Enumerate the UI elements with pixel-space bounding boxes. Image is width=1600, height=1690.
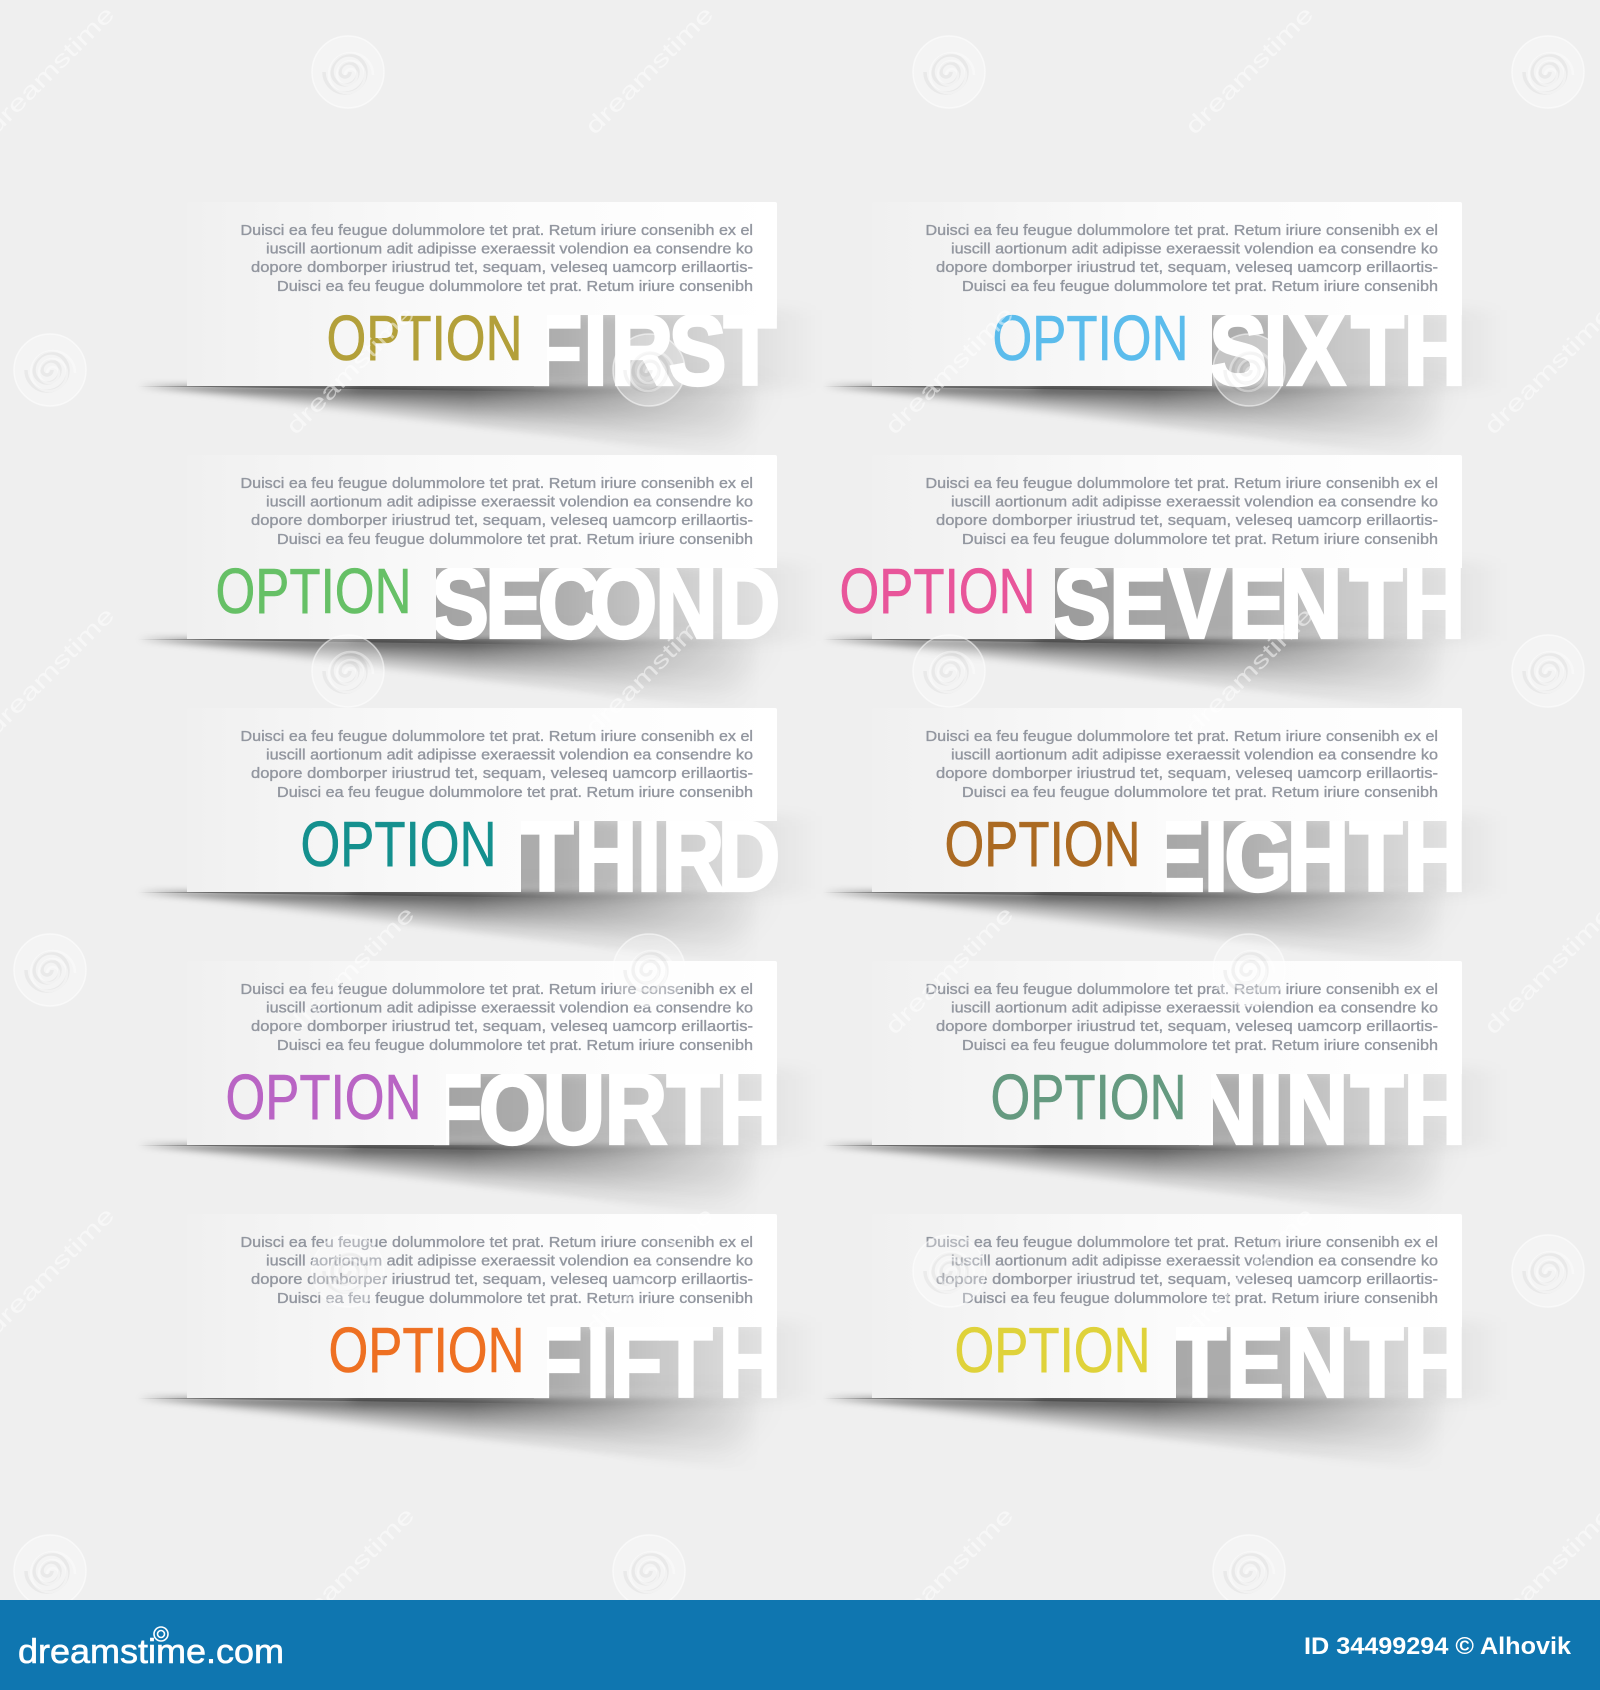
panel: option third: THIRD <box>521 801 780 912</box>
panel: option first: FIRST <box>530 295 776 406</box>
panel: option seventh <box>823 455 1505 719</box>
panel: option fifth: iuscill aortionum adit adipisse exeraessit volendion ea consendre ko <box>266 1254 753 1270</box>
icon: logo spiral <box>154 1627 168 1641</box>
panel: option fourth: Duisci ea feu feugue dolummolore tet prat. Retum iriure consenibh ex el <box>240 982 753 998</box>
panel: option fifth: dopore domborper iriustrud tet, sequam, veleseq uamcorp erillaortis- <box>251 1272 753 1288</box>
footer credit: ID 34499294 © Alhovik <box>1304 1633 1572 1660</box>
panel: option eighth <box>823 708 1505 972</box>
panel: option third: dopore domborper iriustrud tet, sequam, veleseq uamcorp erillaortis- <box>251 766 753 782</box>
panel: option sixth: dopore domborper iriustrud tet, sequam, veleseq uamcorp erillaortis- <box>936 260 1438 276</box>
panel: option first: Duisci ea feu feugue dolummolore tet prat. Retum iriure consenibh <box>277 279 753 295</box>
watermark overlay: dreamstime <box>1180 602 1318 740</box>
panel: option fourth: OPTION <box>226 1061 422 1133</box>
panel: option sixth: Duisci ea feu feugue dolummolore tet prat. Retum iriure consenibh <box>962 279 1438 295</box>
panel: option second: iuscill aortionum adit adipisse exeraessit volendion ea consendre ko <box>266 495 753 511</box>
panel: option fifth: FIFTH <box>530 1307 781 1418</box>
panel: option seventh: Duisci ea feu feugue dolummolore tet prat. Retum iriure consenibh ex el <box>926 476 1438 492</box>
panel: option first <box>138 202 820 466</box>
footer logo: dreamstime.com: dreamstime.com <box>18 1633 284 1671</box>
panel: option eighth: EIGHTH <box>1147 801 1466 912</box>
panel: option tenth: OPTION <box>954 1314 1150 1386</box>
watermark overlay: dreamstime <box>1479 301 1600 439</box>
footer banner <box>0 1600 1600 1690</box>
panel: option tenth: Duisci ea feu feugue dolummolore tet prat. Retum iriure consenibh <box>962 1291 1438 1307</box>
watermark overlay: dreamstime <box>880 901 1018 1039</box>
panel: option second <box>138 455 820 719</box>
panel: option first: dopore domborper iriustrud tet, sequam, veleseq uamcorp erillaortis- <box>251 260 753 276</box>
panel: option fourth: FOURTH <box>430 1054 781 1165</box>
panel: option fourth: Duisci ea feu feugue dolummolore tet prat. Retum iriure consenibh <box>277 1038 753 1054</box>
panel: option fifth <box>138 1214 820 1478</box>
panel: option eighth: OPTION <box>944 808 1140 880</box>
panel: option tenth: TENTH <box>1174 1307 1466 1418</box>
panel: option second: dopore domborper iriustrud tet, sequam, veleseq uamcorp erillaortis- <box>251 513 753 529</box>
panel: option sixth: SIXTH <box>1209 295 1466 406</box>
panel: option fifth: OPTION <box>328 1314 524 1386</box>
panel: option eighth: dopore domborper iriustrud tet, sequam, veleseq uamcorp erillaortis- <box>936 766 1438 782</box>
watermark overlay: dreamstime <box>880 301 1018 439</box>
panel: option fourth: dopore domborper iriustrud tet, sequam, veleseq uamcorp erillaortis- <box>251 1019 753 1035</box>
panel: option first: Duisci ea feu feugue dolummolore tet prat. Retum iriure consenibh ex el <box>240 223 753 239</box>
panel: option tenth <box>823 1214 1505 1478</box>
panel: option ninth: OPTION <box>990 1061 1186 1133</box>
watermark overlay: dreamstime <box>1180 1 1318 139</box>
watermark overlay: dreamstime <box>1479 1502 1600 1640</box>
panel: option tenth: dopore domborper iriustrud tet, sequam, veleseq uamcorp erillaortis- <box>936 1272 1438 1288</box>
panel: option fourth: iuscill aortionum adit adipisse exeraessit volendion ea consendre ko <box>266 1001 753 1017</box>
panel: option second: OPTION <box>216 555 412 627</box>
panel: option fifth: Duisci ea feu feugue dolummolore tet prat. Retum iriure consenibh ex el <box>240 1235 753 1251</box>
panel: option seventh: OPTION <box>840 555 1036 627</box>
panel: option second: Duisci ea feu feugue dolummolore tet prat. Retum iriure consenibh ex el <box>240 476 753 492</box>
panel: option third: Duisci ea feu feugue dolummolore tet prat. Retum iriure consenibh <box>277 785 753 801</box>
panel: option seventh: SEVENTH <box>1053 548 1465 659</box>
panel: option ninth: iuscill aortionum adit adipisse exeraessit volendion ea consendre ko <box>951 1001 1438 1017</box>
panel: option second: SECOND <box>431 548 780 659</box>
watermark overlay: dreamstime <box>580 602 718 740</box>
watermark overlay: dreamstime <box>281 901 419 1039</box>
watermark overlay: dreamstime <box>1180 1202 1318 1340</box>
panel: option fourth <box>138 961 820 1225</box>
panel: option eighth: Duisci ea feu feugue dolummolore tet prat. Retum iriure consenibh ex el <box>926 729 1438 745</box>
watermark overlay: dreamstime <box>1479 901 1600 1039</box>
panel: option third: Duisci ea feu feugue dolummolore tet prat. Retum iriure consenibh ex el <box>240 729 753 745</box>
watermark overlay: dreamstime <box>281 301 419 439</box>
panel: option sixth: iuscill aortionum adit adipisse exeraessit volendion ea consendre ko <box>951 242 1438 258</box>
watermark overlay: dreamstime <box>880 1502 1018 1640</box>
panel: option eighth: iuscill aortionum adit adipisse exeraessit volendion ea consendre ko <box>951 748 1438 764</box>
panel: option seventh: iuscill aortionum adit adipisse exeraessit volendion ea consendre ko <box>951 495 1438 511</box>
panel: option ninth: NINTH <box>1195 1054 1466 1165</box>
panel: option seventh: dopore domborper iriustrud tet, sequam, veleseq uamcorp erillaortis- <box>936 513 1438 529</box>
watermark overlay: dreamstime <box>580 1202 718 1340</box>
panel: option first: OPTION <box>326 302 522 374</box>
panel: option tenth: Duisci ea feu feugue dolummolore tet prat. Retum iriure consenibh ex el <box>926 1235 1438 1251</box>
panel: option seventh: Duisci ea feu feugue dolummolore tet prat. Retum iriure consenibh <box>962 532 1438 548</box>
panel: option ninth: dopore domborper iriustrud tet, sequam, veleseq uamcorp erillaortis- <box>936 1019 1438 1035</box>
panel: option tenth: iuscill aortionum adit adipisse exeraessit volendion ea consendre ko <box>951 1254 1438 1270</box>
panel: option sixth <box>823 202 1505 466</box>
panel: option third: OPTION <box>300 808 496 880</box>
watermark overlay: dreamstime <box>580 1 718 139</box>
panel: option third <box>138 708 820 972</box>
panel: option fifth: Duisci ea feu feugue dolummolore tet prat. Retum iriure consenibh <box>277 1291 753 1307</box>
panel: option eighth: Duisci ea feu feugue dolummolore tet prat. Retum iriure consenibh <box>962 785 1438 801</box>
panel: option ninth: Duisci ea feu feugue dolummolore tet prat. Retum iriure consenibh ex el <box>926 982 1438 998</box>
watermark overlay: dreamstime <box>281 1502 419 1640</box>
panel: option first: iuscill aortionum adit adipisse exeraessit volendion ea consendre ko <box>266 242 753 258</box>
panel: option ninth: Duisci ea feu feugue dolummolore tet prat. Retum iriure consenibh <box>962 1038 1438 1054</box>
panel: option second: Duisci ea feu feugue dolummolore tet prat. Retum iriure consenibh <box>277 532 753 548</box>
panel: option third: iuscill aortionum adit adipisse exeraessit volendion ea consendre ko <box>266 748 753 764</box>
panel: option sixth: OPTION <box>992 302 1188 374</box>
panel: option sixth: Duisci ea feu feugue dolummolore tet prat. Retum iriure consenibh ex el <box>926 223 1438 239</box>
panel: option ninth <box>823 961 1505 1225</box>
